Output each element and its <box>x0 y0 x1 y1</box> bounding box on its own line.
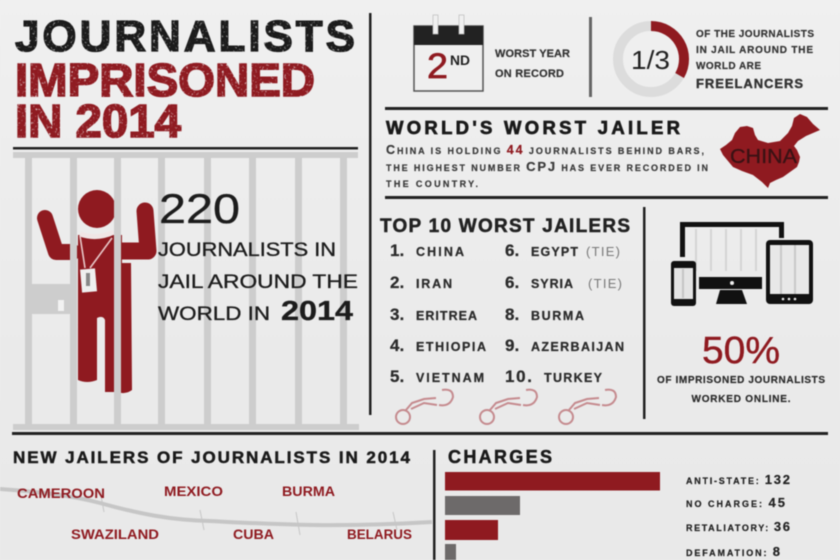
list: top 10 worst jailers: 6. <box>505 241 519 260</box>
prison bars <box>25 158 347 424</box>
text: freelancers: WORLD ARE <box>696 61 761 72</box>
stat: 220 journalists: WORLD IN <box>158 303 270 325</box>
list: top 10 worst jailers: 4. <box>390 336 404 355</box>
list: top 10 worst jailers: 8. <box>505 305 519 324</box>
list: top 10 worst jailers: ETHIOPIA <box>416 340 486 354</box>
list: top 10 worst jailers: 6. <box>505 273 519 292</box>
chart: one third donut: 1/3 <box>631 45 670 75</box>
list: top 10 worst jailers: EGYPT <box>531 245 578 259</box>
list: top 10 worst jailers: 1. <box>390 241 404 260</box>
list: top 10 worst jailers: 3. <box>390 305 404 324</box>
heading: world's worst jailer: WORLD'S WORST JAILER <box>386 117 680 138</box>
heading: charges: CHARGES <box>448 447 552 467</box>
title: IMPRISONED <box>15 54 315 106</box>
list: top 10 worst jailers: (TIE) <box>586 244 620 259</box>
list: top 10 worst jailers: BURMA <box>531 309 584 323</box>
stat: 220 journalists <box>158 185 358 326</box>
list: top 10 worst jailers: (TIE) <box>588 276 622 291</box>
list: new jailer countries <box>17 484 412 542</box>
stat: 50 percent worked online: WORKED ONLINE. <box>692 394 791 405</box>
text: freelancers: OF THE JOURNALISTS <box>696 29 814 40</box>
text: china description: CHINA IS HOLDING 44 JOURNALISTS BEHIND BARS, <box>386 143 704 157</box>
list: top 10 worst jailers: IRAN <box>416 277 452 291</box>
icon: phone, monitor and tablet <box>671 224 813 306</box>
text: freelancers: FREELANCERS <box>696 76 803 91</box>
title: JOURNALISTS <box>15 12 355 61</box>
list: new jailer countries: CAMEROON <box>17 486 105 501</box>
chart labels: charges: DEFAMATION: 8 <box>686 544 780 559</box>
text: china description: THE COUNTRY. <box>386 179 478 189</box>
map: china <box>720 114 820 188</box>
icon: calendar second worst year <box>414 15 483 91</box>
list: new jailer countries: BURMA <box>282 484 335 499</box>
barbed wire <box>0 489 432 535</box>
title <box>15 12 355 147</box>
title: IN 2014 <box>15 95 181 147</box>
chart labels: charges <box>686 472 790 559</box>
stat: 50 percent worked online <box>657 330 825 405</box>
text: freelancers <box>696 29 814 91</box>
list: top 10 worst jailers: 9. <box>505 336 519 355</box>
heading: new jailers: NEW JAILERS OF JOURNALISTS IN 2014 <box>13 448 411 467</box>
text: freelancers: IN JAIL AROUND THE <box>696 45 813 56</box>
list: top 10 worst jailers <box>390 241 624 386</box>
icon: calendar second worst year: 2 <box>427 47 448 86</box>
stat: 220 journalists: 2014 <box>281 295 353 326</box>
list: top 10 worst jailers: 10. <box>505 367 532 386</box>
stat: 50 percent worked online: OF IMPRISONED JOURNALISTS <box>657 375 825 386</box>
list: new jailer countries: BELARUS <box>347 527 412 542</box>
text: worst year on record <box>495 48 570 80</box>
heading: top 10 worst jailers: TOP 10 WORST JAILERS <box>380 216 630 237</box>
chart labels: charges: RETALIATORY: 36 <box>686 519 790 534</box>
list: top 10 worst jailers: 2. <box>390 273 404 292</box>
text: china description <box>386 143 708 189</box>
list: top 10 worst jailers: CHINA <box>416 245 464 259</box>
text: worst year on record: WORST YEAR <box>495 48 570 60</box>
chart labels: charges: ANTI-STATE: 132 <box>686 472 790 487</box>
bar chart: charges <box>445 472 660 560</box>
list: top 10 worst jailers: VIETNAM <box>416 371 484 385</box>
icon: calendar second worst year: ND <box>450 52 470 68</box>
list: new jailer countries: SWAZILAND <box>71 527 159 542</box>
list: new jailer countries: CUBA <box>233 527 274 542</box>
list: top 10 worst jailers: 5. <box>390 367 404 386</box>
icon: handcuffs <box>396 390 616 424</box>
prison bars frame <box>13 152 359 430</box>
figure: prisoner <box>45 190 148 393</box>
list: top 10 worst jailers: SYRIA <box>531 277 573 291</box>
panel: jailed journalist behind bars <box>13 152 359 430</box>
text: worst year on record: ON RECORD <box>495 68 564 80</box>
list: top 10 worst jailers: ERITREA <box>416 309 477 323</box>
list: new jailer countries: MEXICO <box>164 484 223 499</box>
list: top 10 worst jailers: TURKEY <box>544 371 603 385</box>
chart labels: charges: NO CHARGE: 45 <box>686 495 785 510</box>
map: china: CHINA <box>730 146 798 168</box>
text: china description: THE HIGHEST NUMBER CPJ HAS EVER RECORDED IN <box>386 159 708 174</box>
stat: 220 journalists: JOURNALISTS IN <box>158 239 336 261</box>
chart: one third donut <box>618 26 684 92</box>
stat: 220 journalists: 220 <box>159 185 240 232</box>
stat: 50 percent worked online: 50% <box>702 330 780 372</box>
list: top 10 worst jailers: AZERBAIJAN <box>531 340 624 354</box>
stat: 220 journalists: JAIL AROUND THE <box>158 271 358 293</box>
